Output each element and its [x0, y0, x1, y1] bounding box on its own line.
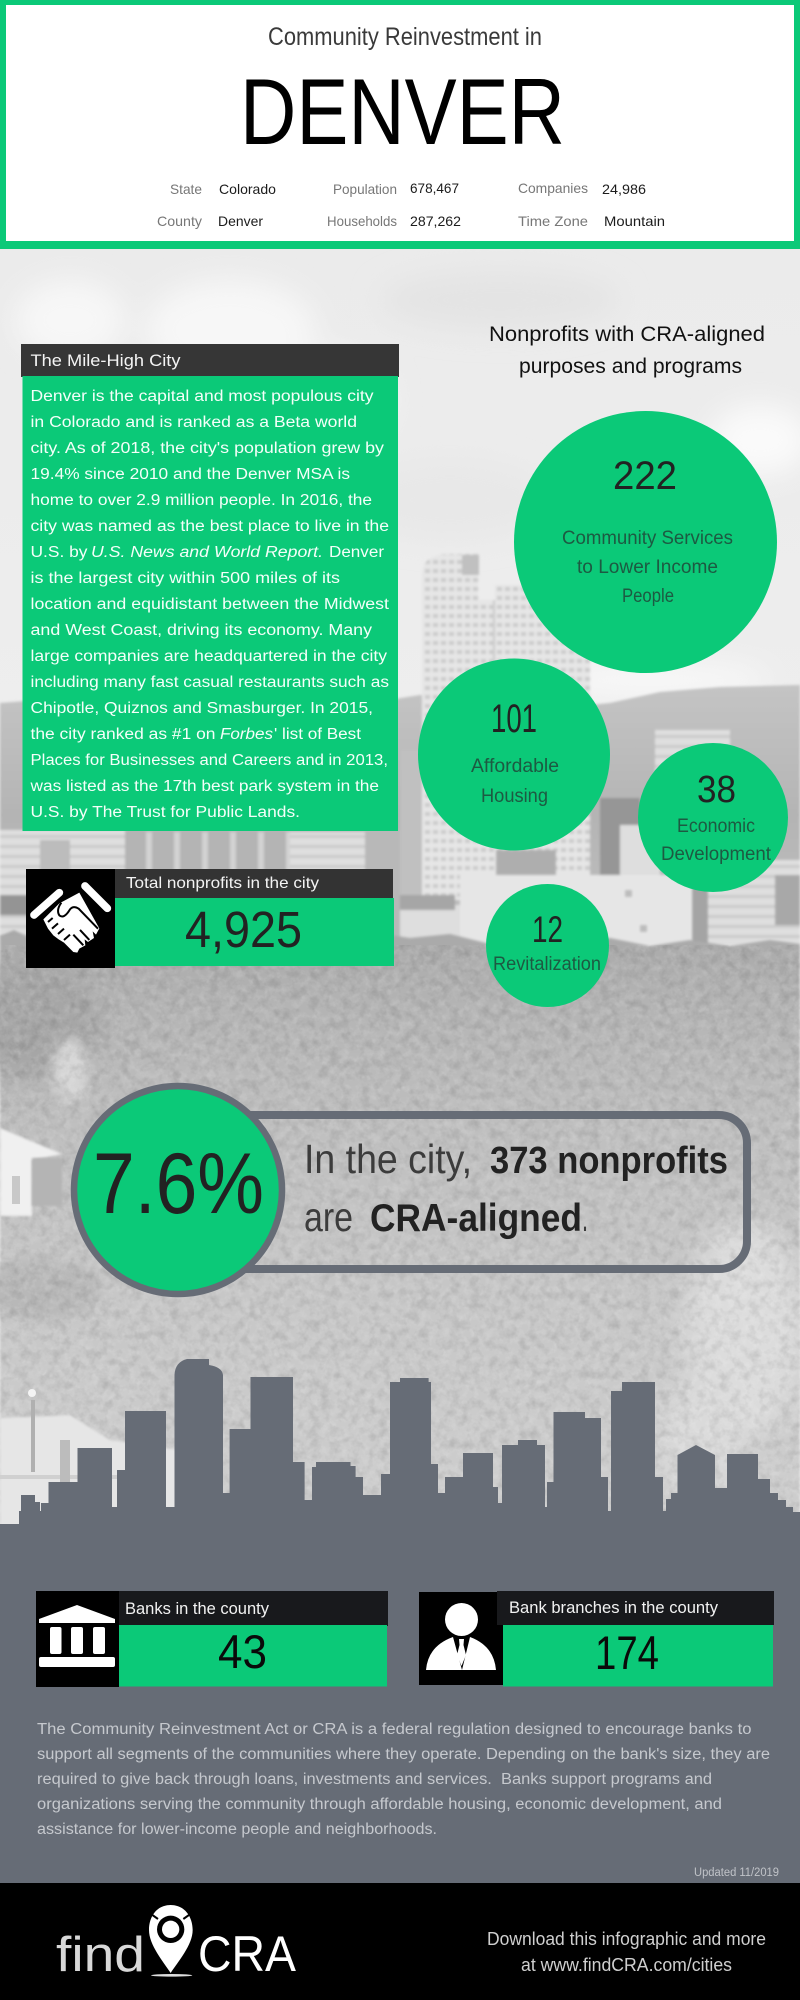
city description text: Denver	[329, 544, 384, 561]
value: 38	[697, 769, 736, 811]
city stats: Population	[333, 181, 397, 197]
label: Economic	[677, 816, 755, 837]
label: Housing	[481, 786, 548, 807]
text block: CRA explanation: required to give back through loans, investments and services. Banks support programs and	[37, 1771, 712, 1788]
city stats: Mountain	[604, 213, 665, 229]
city description text: city was named as the best place to live in the	[30, 518, 389, 535]
heading: nonprofits with CRA-aligned purposes	[489, 323, 765, 378]
city description text: home to over 2.9 million people. In 2016, the	[30, 492, 372, 509]
panel heading: The Mile-High City	[30, 351, 181, 370]
label: Community Services	[562, 528, 733, 549]
label	[661, 816, 772, 865]
icon: businessman	[426, 1603, 496, 1670]
city stats: County	[157, 213, 202, 229]
bubble: community services	[514, 411, 777, 673]
label: Affordable	[471, 756, 559, 777]
updated date: Updated 11/2019	[694, 1867, 779, 1879]
bubble: revitalization	[486, 884, 609, 1007]
text block: CRA explanation: The Community Reinvestment Act or CRA is a federal regulation designed to encourage banks to	[37, 1721, 752, 1738]
heading: nonprofits with CRA-aligned purposes: Nonprofits with CRA-aligned	[489, 323, 765, 346]
city description text: U.S. by	[30, 544, 88, 561]
bubble: affordable housing	[418, 658, 610, 850]
city description text: large companies are headquartered in the city	[30, 648, 387, 665]
label	[562, 528, 733, 607]
label: to Lower Income	[577, 557, 718, 578]
city stats: Households	[327, 213, 397, 229]
value: 12	[532, 909, 563, 950]
download call to action	[487, 1928, 766, 1975]
icon: bank	[39, 1605, 115, 1667]
city description text	[29, 388, 390, 821]
text block: CRA explanation	[37, 1721, 770, 1838]
city stats: State	[170, 181, 202, 197]
city description text: was listed as the 17th best park system in the	[29, 778, 379, 795]
tree line and foliage	[0, 928, 800, 1587]
city stats: Colorado	[219, 181, 276, 197]
callout: 7.6% CRA-aligned	[74, 1086, 747, 1294]
stat: bank branches in the county	[419, 1591, 774, 1686]
city stats	[157, 180, 665, 229]
skyline silhouette and lower grey panel	[0, 1359, 800, 1884]
city description text: in Colorado and is ranked as a Beta world	[30, 414, 357, 431]
city description text: ' list of Best	[274, 726, 362, 743]
city stats: 24,986	[602, 181, 646, 197]
city description text: including many fast casual restaurants such as	[30, 674, 389, 691]
download call to action: at www.findCRA.com/cities	[521, 1954, 732, 1975]
city stats: Denver	[218, 213, 263, 229]
city description text: Forbes	[220, 726, 273, 743]
city description text: U.S. by The Trust for Public Lands.	[30, 804, 300, 821]
label: Revitalization	[493, 954, 601, 975]
value: 222	[613, 454, 677, 498]
panel: The Mile-High City	[21, 344, 399, 831]
callout text: .	[582, 1194, 588, 1240]
stat: banks in the county	[36, 1591, 388, 1687]
download call to action: Download this infographic and more	[487, 1928, 766, 1949]
logo: findCRA: find	[56, 1928, 145, 1982]
header panel with green border	[0, 0, 800, 249]
callout text: In the city,	[304, 1136, 472, 1182]
city description text: U.S. News and World Report.	[91, 544, 323, 561]
footer	[0, 1883, 800, 2000]
text block: CRA explanation: support all segments of the communities where they operate. Depending on the bank's size, they are	[37, 1746, 770, 1763]
city description text: the city ranked as #1 on	[30, 726, 216, 743]
background photo: Denver skyline and trees	[0, 249, 800, 1649]
city description text: and West Coast, driving its economy. Many	[30, 622, 372, 639]
label: Development	[661, 844, 772, 865]
logo: findCRA: CRA	[198, 1926, 297, 1982]
city description text: location and equidistant between the Midwest	[30, 596, 390, 613]
bubble: economic development	[638, 743, 788, 892]
value: 174	[595, 1626, 659, 1679]
title line: Community Reinvestment in	[268, 23, 542, 51]
value: 43	[218, 1625, 267, 1678]
label: Banks in the county	[125, 1599, 269, 1618]
value: 101	[491, 697, 537, 741]
logo: findCRA	[56, 1905, 297, 1982]
city name: DENVER	[240, 59, 565, 164]
city stats: Companies	[518, 180, 588, 196]
city stats: 678,467	[410, 180, 459, 196]
label	[471, 756, 559, 807]
city description text: 19.4% since 2010 and the Denver MSA is	[30, 466, 350, 483]
callout text: are	[304, 1194, 353, 1240]
icon: map pin	[149, 1905, 193, 1977]
stat: total nonprofits in the city	[26, 869, 394, 968]
callout text	[304, 1136, 728, 1240]
value: 4,925	[185, 901, 302, 958]
heading: nonprofits with CRA-aligned purposes: purposes and programs	[519, 355, 742, 378]
city stats: 287,262	[410, 213, 461, 229]
city description text: Places for Businesses and Careers and in 2013,	[30, 752, 388, 769]
text block: CRA explanation: assistance for lower-income people and neighborhoods.	[37, 1821, 437, 1838]
callout text: CRA-aligned	[370, 1197, 582, 1240]
label: People	[622, 586, 674, 607]
city stats: Time Zone	[518, 213, 588, 229]
city description text: Denver is the capital and most populous city	[30, 388, 374, 405]
icon: handshake	[34, 886, 107, 953]
label: Bank branches in the county	[509, 1598, 718, 1617]
city description text: is the largest city within 500 miles of its	[30, 570, 340, 587]
label: Total nonprofits in the city	[126, 875, 319, 892]
text block: CRA explanation: organizations serving the community through affordable housing, economic development, and	[37, 1796, 722, 1813]
city description text: city. As of 2018, the city's population grew by	[30, 440, 384, 457]
city description text: Chipotle, Quiznos and Smasburger. In 2015,	[30, 700, 373, 717]
callout text: 373 nonprofits	[490, 1140, 728, 1182]
percentage: 7.6%	[93, 1136, 264, 1232]
